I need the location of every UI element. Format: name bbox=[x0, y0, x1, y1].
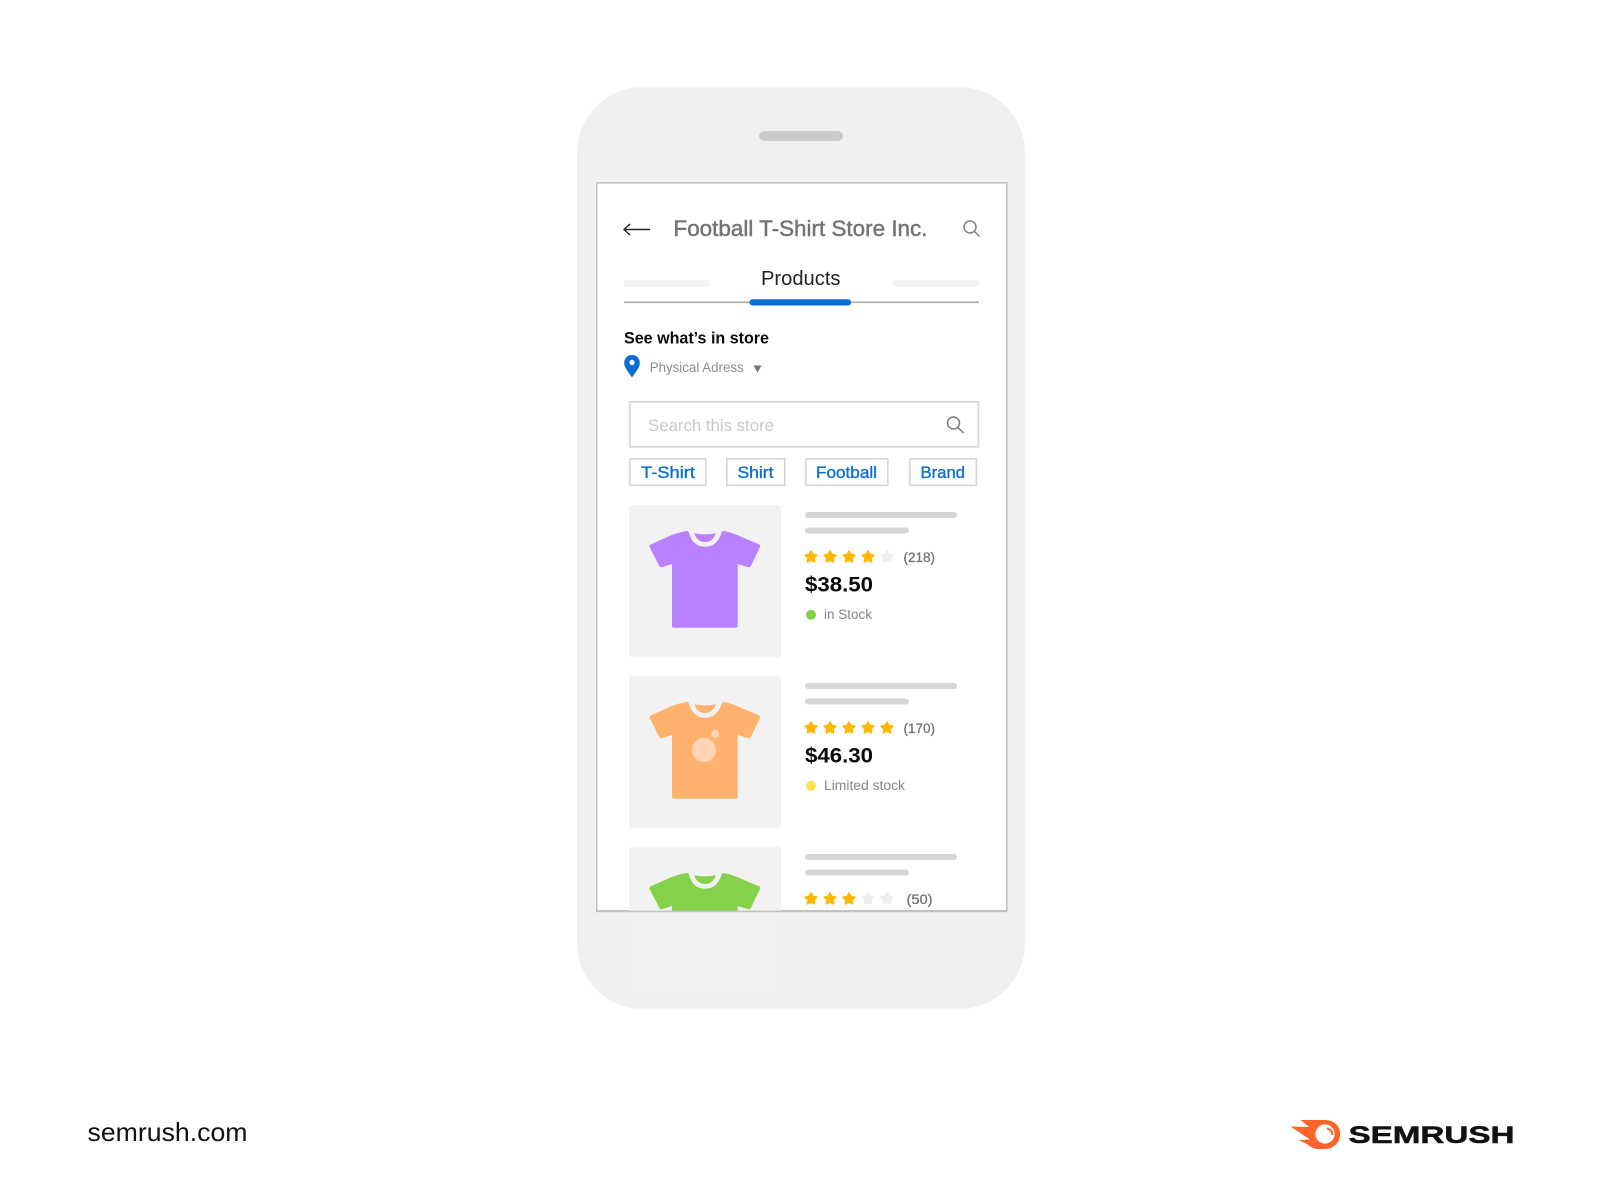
title placeholder lines bbox=[805, 512, 957, 534]
section heading: See what’s in store bbox=[624, 329, 769, 347]
screen bottom border bbox=[596, 911, 1008, 912]
icon: box search bbox=[948, 417, 964, 433]
filter chips: Football bbox=[816, 464, 877, 482]
star rating: (218) bbox=[904, 550, 935, 565]
icon: back arrow bbox=[624, 224, 650, 235]
tab label: products: Products bbox=[761, 268, 840, 290]
speaker bbox=[759, 131, 843, 141]
star rating bbox=[805, 721, 935, 736]
price: $46.30 bbox=[805, 743, 873, 767]
search box: Search this store bbox=[648, 417, 774, 435]
product image: purple t-shirt bbox=[629, 505, 781, 657]
star rating: (50) bbox=[906, 892, 932, 907]
price: $38.50 bbox=[805, 572, 873, 596]
product 2 bbox=[629, 676, 957, 828]
title placeholder lines bbox=[805, 683, 957, 704]
phone body bbox=[577, 87, 1025, 1009]
star rating bbox=[805, 892, 932, 907]
stock status: Limited stock bbox=[824, 778, 905, 793]
tab bar bbox=[624, 268, 979, 306]
search box bbox=[630, 402, 978, 447]
product 3 bbox=[629, 847, 957, 911]
product 1 bbox=[629, 505, 957, 657]
icon: header search bbox=[964, 221, 980, 236]
filter chips bbox=[630, 459, 976, 485]
logo wordmark: SEMRUSH bbox=[1348, 1122, 1514, 1149]
store title: Football T-Shirt Store Inc. bbox=[674, 216, 928, 241]
faint product card below screen bbox=[629, 905, 781, 998]
star rating: (170) bbox=[904, 721, 935, 736]
icon: semrush flame bbox=[1290, 1120, 1340, 1149]
stock status: in Stock bbox=[824, 607, 872, 622]
phone screen bbox=[596, 182, 1008, 911]
filter chips: Shirt bbox=[738, 464, 774, 482]
semrush logo bbox=[1290, 1120, 1514, 1149]
footer url: semrush.com bbox=[88, 1117, 248, 1147]
filter chips: Brand bbox=[920, 464, 965, 482]
address dropdown: Physical Adress bbox=[650, 360, 744, 375]
title placeholder lines bbox=[805, 854, 957, 876]
product image: green t-shirt bbox=[629, 847, 781, 911]
icon: location pin bbox=[624, 355, 640, 378]
star rating bbox=[805, 550, 935, 565]
filter chips: T-Shirt bbox=[641, 464, 695, 482]
product image: orange t-shirt bbox=[629, 676, 781, 828]
